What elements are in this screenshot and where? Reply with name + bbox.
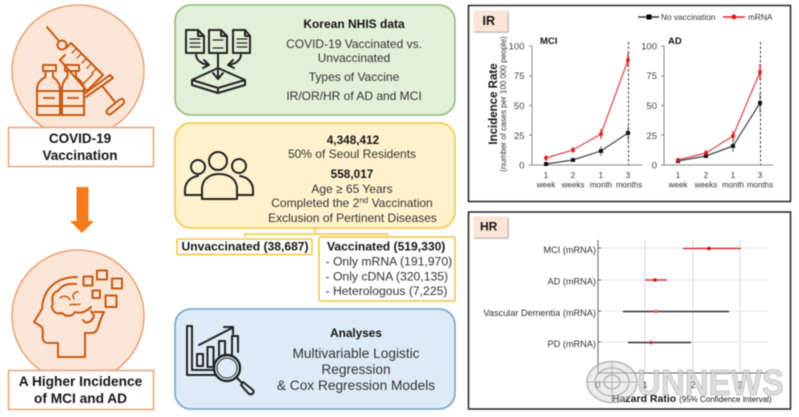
- text: population counts: 4,348,412: [327, 133, 380, 147]
- line chart: MCI: month: [590, 180, 612, 190]
- line chart: MCI: MCI: [540, 36, 557, 47]
- panel: Korean NHIS data: [175, 5, 455, 115]
- box: unvaccinated group: Unvaccinated (38,687): [182, 240, 309, 254]
- line chart: MCI: 1: [544, 171, 549, 180]
- connector: population split: [245, 228, 387, 237]
- forest plot: [483, 240, 772, 405]
- icon: syringe: [47, 27, 124, 115]
- text: population counts: Age ≥ 65 Years: [311, 182, 393, 196]
- text: NHIS data description: Korean NHIS data: [303, 17, 405, 31]
- watermark: UNNEWS: [587, 362, 784, 403]
- line chart: MCI: 2: [571, 171, 576, 180]
- panel: IR incidence rate charts: [468, 6, 790, 202]
- text: NHIS data description: IR/OR/HR of AD and MCI: [286, 89, 422, 103]
- text: population counts: Exclusion of Pertinent Diseases: [268, 211, 437, 225]
- box: vaccinated group: - Only mRNA (191,970): [326, 254, 452, 268]
- box: vaccinated group: [319, 237, 455, 301]
- box: vaccinated group: - Only cDNA (320,135): [326, 270, 448, 284]
- arrow: vaccination to higher incidence: [70, 187, 94, 233]
- icon circle: outcome: [12, 250, 144, 382]
- y-axis title: Incidence Rate: [488, 63, 500, 145]
- panel background: [175, 309, 455, 409]
- panel background: [175, 123, 455, 228]
- line chart: AD: 1: [731, 171, 736, 180]
- forest plot: Vascular Dementia (mRNA): [483, 308, 596, 318]
- panel: HR hazard ratio forest plot: [468, 212, 790, 409]
- text: population counts: 50% of Seoul Residents: [288, 147, 416, 161]
- forest plot: 2: [690, 380, 696, 390]
- label box: COVID-19 Vaccination: COVID-19: [49, 131, 111, 146]
- line chart: AD: 100: [641, 42, 657, 52]
- icon: group of people: [185, 152, 253, 199]
- forest plot: 3: [737, 380, 743, 390]
- line chart: AD: 3: [758, 171, 763, 180]
- line chart: AD: 25: [646, 131, 657, 142]
- icon: vaccine vials: [37, 65, 84, 115]
- text: NHIS data description: COVID-19 Vaccinated vs.: [286, 37, 422, 51]
- line chart: MCI: 25: [514, 131, 524, 142]
- line chart: AD: months: [747, 180, 773, 190]
- legend: No vaccination: [661, 12, 716, 22]
- text: analyses description: [277, 326, 435, 393]
- icon circle: vaccination: [12, 5, 144, 137]
- line chart: AD: 0: [652, 160, 657, 172]
- text: population counts: nd: [359, 196, 368, 205]
- watermark: UNNEWS: UNNEWS: [637, 362, 784, 403]
- panel: analyses: [175, 309, 455, 409]
- line chart: MCI: 75: [514, 71, 524, 82]
- tag: IR: IR: [482, 14, 495, 28]
- line chart: MCI: 50: [514, 101, 524, 112]
- line chart: AD: 75: [646, 71, 657, 82]
- forest plot: MCI (mRNA): [543, 245, 596, 255]
- line chart: AD: month: [722, 180, 744, 190]
- line chart: AD: 50: [646, 101, 657, 112]
- box: vaccinated group: - Heterologous (7,225): [326, 284, 447, 298]
- forest plot: 0: [595, 380, 601, 390]
- line chart: AD: weeks: [694, 180, 717, 190]
- text: NHIS data description: Types of Vaccine: [309, 70, 400, 84]
- panel frame: [468, 212, 790, 409]
- line chart: MCI: weeks: [561, 180, 584, 190]
- label box: A Higher Incidence of MCI and AD: of MCI and AD: [34, 391, 127, 406]
- label box: COVID-19 Vaccination: Vaccination: [42, 148, 118, 163]
- line chart: AD: [641, 36, 773, 190]
- panel: higher incidence outcome: [8, 250, 154, 410]
- text: NHIS data description: Unvaccinated: [318, 51, 390, 65]
- text: analyses description: Multivariable Logistic: [292, 346, 420, 361]
- forest plot: AD (mRNA): [548, 276, 596, 286]
- tag: HR: HR: [480, 220, 498, 234]
- text: analyses description: & Cox Regression Models: [277, 378, 435, 393]
- label box: COVID-19 Vaccination: [8, 128, 154, 166]
- panel: COVID-19 vaccination: [8, 5, 154, 166]
- panel: study population: [175, 123, 455, 228]
- line chart: MCI: week: [536, 180, 556, 190]
- line chart: MCI: 100: [509, 42, 524, 52]
- line chart: AD: 2: [704, 171, 709, 180]
- legend: mRNA: [748, 12, 773, 22]
- label box: A Higher Incidence of MCI and AD: A Higher Incidence: [19, 374, 143, 389]
- line chart: MCI: 3: [626, 171, 631, 180]
- forest plot: PD (mRNA): [548, 339, 596, 349]
- forest plot: 1: [642, 380, 648, 390]
- text: population counts: [268, 133, 437, 225]
- tag: IR: [474, 10, 508, 32]
- panel background: [175, 5, 455, 115]
- line chart: AD: week: [668, 180, 688, 190]
- text: NHIS data description: [286, 17, 422, 103]
- y-axis title: (number of cases per 100 000 people): [499, 36, 508, 172]
- text: population counts: 558,017: [331, 167, 374, 181]
- line chart: MCI: 1: [599, 171, 604, 180]
- tag: HR: [474, 216, 508, 238]
- forest plot: Hazard Ratio (95% Confidence Interval): [612, 393, 772, 405]
- line chart: MCI: months: [616, 180, 642, 190]
- box: vaccinated group: Vaccinated (519,330): [327, 240, 445, 254]
- legend: [638, 12, 773, 22]
- text: analyses description: Analyses: [330, 326, 382, 340]
- text: analyses description: Regression: [321, 362, 391, 377]
- text: population counts: Completed the 2: [271, 196, 359, 210]
- line chart: MCI: 0: [519, 160, 524, 172]
- line chart: AD: 1: [676, 171, 681, 180]
- icon: chart with magnifier: [187, 326, 254, 394]
- text: population counts: Vaccination: [368, 196, 433, 210]
- y-axis title: [488, 36, 508, 172]
- icon: documents into database: [186, 30, 250, 93]
- icon: head with brain fragments: [34, 270, 122, 357]
- panel frame: [468, 6, 790, 202]
- line chart: MCI: [509, 36, 642, 190]
- label box: A Higher Incidence of MCI and AD: [8, 370, 154, 410]
- line chart: AD: AD: [668, 36, 682, 47]
